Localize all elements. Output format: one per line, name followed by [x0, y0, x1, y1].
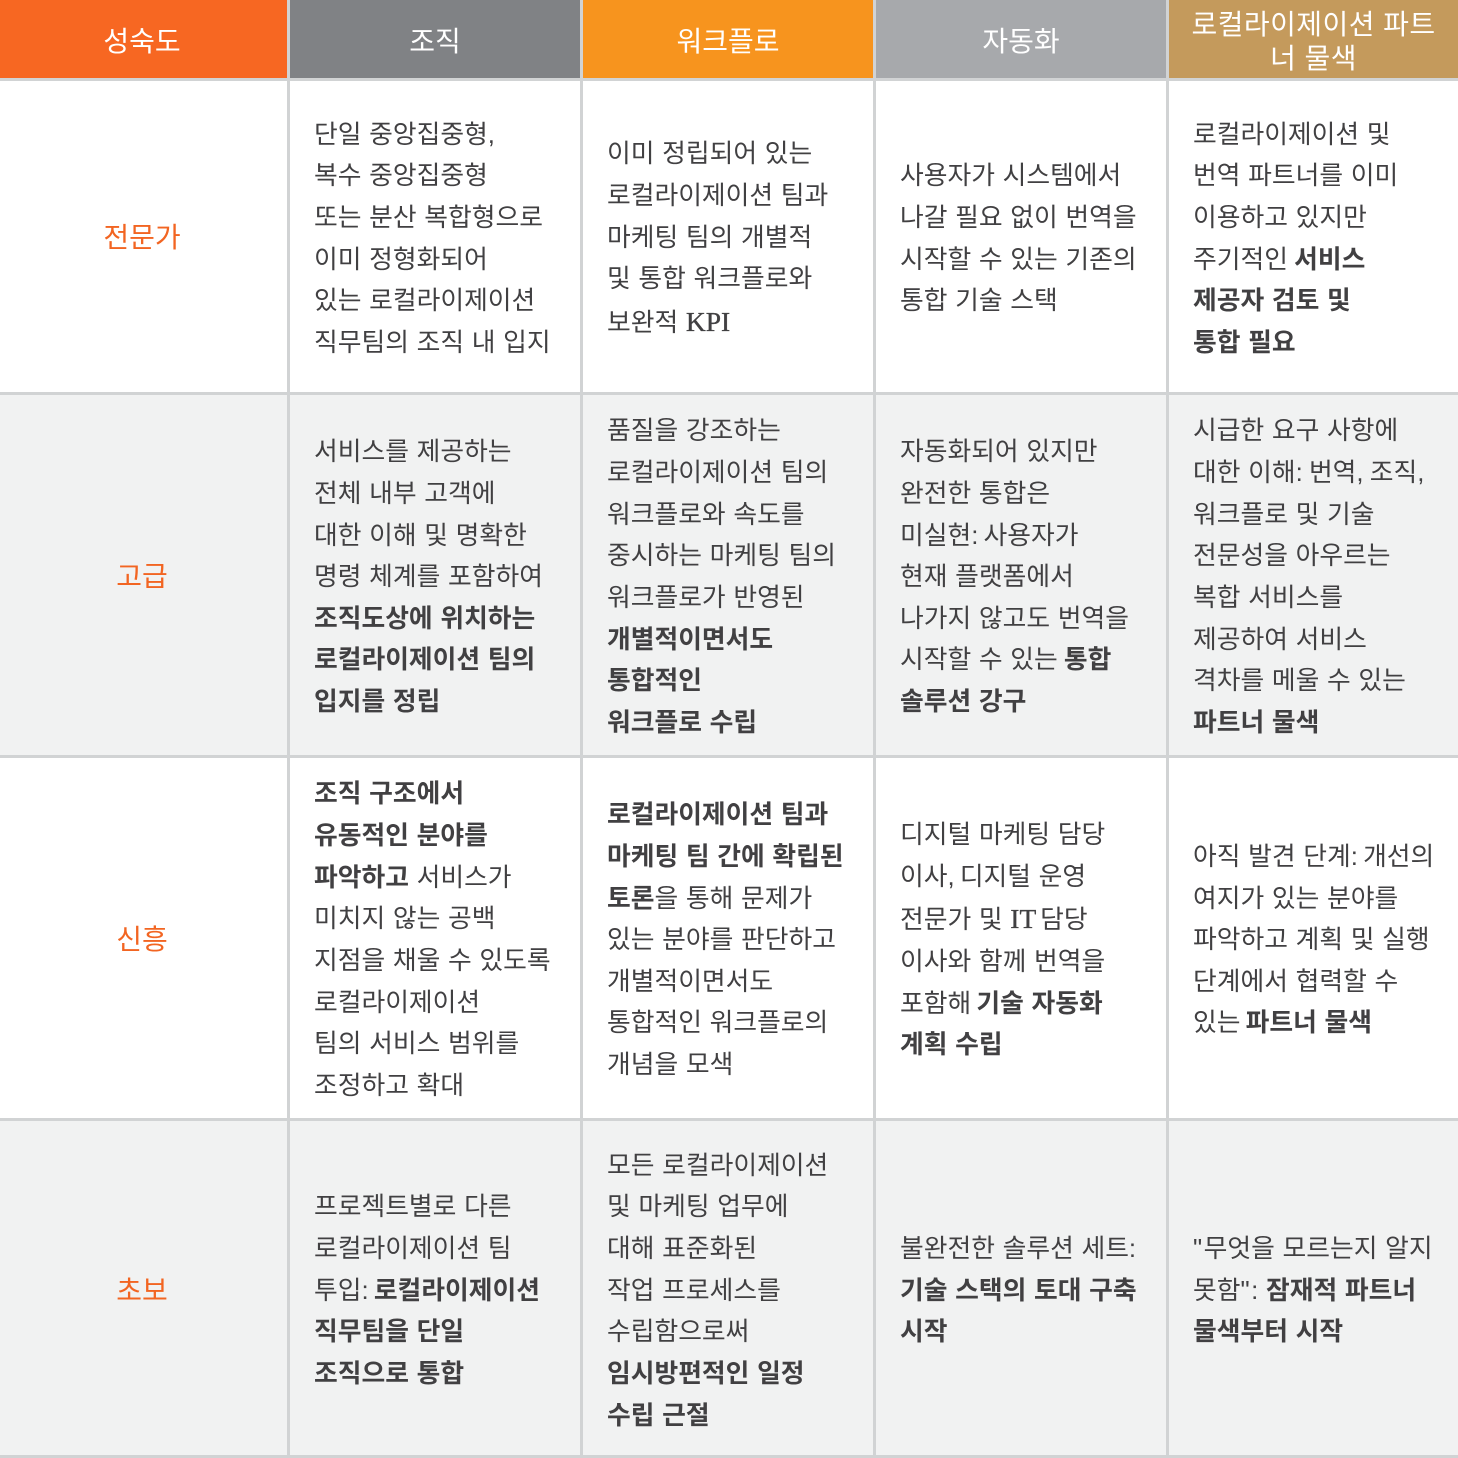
- row label: beginner: 초보: [116, 1274, 168, 1306]
- cell: advanced automation: 완전한 통합은: [900, 480, 1050, 508]
- header: localization partner sourcing: 로컬라이제이션 파트: [1191, 9, 1436, 40]
- cell: expert organization: 직무팀의 조직 내 입지: [314, 329, 551, 357]
- cell: expert partner: 주기적인 서비스: [1193, 246, 1365, 274]
- cell: advanced automation: 미실현: 사용자가: [900, 522, 1078, 550]
- cell: emerging partner: 아직 발견 단계: 개선의: [1193, 843, 1434, 871]
- cell: expert workflow: [583, 81, 873, 392]
- cell: emerging workflow: [583, 758, 873, 1118]
- cell: expert workflow: 이미 정립되어 있는: [607, 140, 812, 168]
- cell: advanced organization: 명령 체계를 포함하여: [314, 563, 543, 591]
- cell: emerging workflow: 개념을 모색: [607, 1051, 733, 1079]
- cell: emerging organization: 유동적인 분야를: [314, 822, 488, 850]
- cell: expert partner: [1169, 81, 1458, 392]
- row label: emerging: 신흥: [116, 924, 168, 954]
- cell: emerging partner: 단계에서 협력할 수: [1193, 968, 1398, 996]
- cell: beginner organization: 직무팀을 단일: [314, 1318, 464, 1346]
- header: localization partner sourcing: 너 물색: [1270, 43, 1357, 74]
- cell: expert automation: [876, 81, 1166, 392]
- cell: beginner partner: "무엇을 모르는지 알지: [1193, 1235, 1433, 1263]
- cell: advanced automation: 나가지 않고도 번역을: [900, 605, 1129, 633]
- cell: advanced automation: 시작할 수 있는 통합: [900, 646, 1111, 674]
- cell: advanced workflow: 워크플로 수립: [607, 709, 757, 737]
- cell: expert partner: 이용하고 있지만: [1193, 204, 1367, 232]
- cell: emerging organization: 지점을 채울 수 있도록: [314, 947, 551, 975]
- cell: emerging automation: 이사와 함께 번역을: [900, 948, 1105, 976]
- cell: expert partner: 로컬라이제이션 및: [1193, 121, 1391, 149]
- cell: beginner workflow: 수립함으로써: [607, 1318, 749, 1346]
- header: workflow: 워크플로: [676, 26, 780, 57]
- cell: emerging partner: 여지가 있는 분야를: [1193, 885, 1398, 913]
- cell: advanced workflow: 로컬라이제이션 팀의: [607, 459, 828, 487]
- cell: advanced partner: 제공하여 서비스: [1193, 626, 1367, 654]
- cell: beginner partner: [1169, 1121, 1458, 1455]
- cell: emerging automation: 이사, 디지털 운영: [900, 863, 1086, 891]
- cell: beginner automation: 시작: [900, 1318, 947, 1346]
- cell: advanced partner: 복합 서비스를: [1193, 584, 1343, 612]
- cell: beginner partner: 못함": 잠재적 파트너: [1193, 1277, 1416, 1305]
- cell: expert organization: 또는 분산 복합형으로: [314, 204, 543, 232]
- cell: emerging workflow: 로컬라이제이션 팀과: [607, 801, 828, 829]
- cell: advanced partner: 격차를 메울 수 있는: [1193, 667, 1406, 695]
- header: maturity: 성숙도: [103, 26, 181, 57]
- cell: beginner automation: 불완전한 솔루션 세트:: [900, 1235, 1136, 1263]
- cell: advanced workflow: 중시하는 마케팅 팀의: [607, 542, 836, 570]
- cell: expert partner: 번역 파트너를 이미: [1193, 162, 1398, 190]
- row label: expert: [0, 81, 287, 392]
- header: maturity: [0, 0, 287, 78]
- cell: expert partner: 제공자 검토 및: [1193, 287, 1351, 315]
- cell: emerging partner: 있는 파트너 물색: [1193, 1009, 1372, 1037]
- cell: expert automation: 시작할 수 있는 기존의: [900, 246, 1137, 274]
- cell: expert workflow: 로컬라이제이션 팀과: [607, 182, 828, 210]
- row: emerging: [0, 758, 1458, 1118]
- cell: advanced organization: 로컬라이제이션 팀의: [314, 646, 535, 674]
- cell: expert organization: 있는 로컬라이제이션: [314, 287, 535, 315]
- cell: emerging workflow: 통합적인 워크플로의: [607, 1009, 828, 1037]
- cell: advanced organization: 전체 내부 고객에: [314, 480, 495, 508]
- cell: advanced partner: 대한 이해: 번역, 조직,: [1193, 459, 1424, 487]
- cell: emerging workflow: 토론을 통해 문제가: [607, 885, 812, 913]
- cell: emerging organization: 조직 구조에서: [314, 780, 464, 808]
- cell: advanced automation: 현재 플랫폼에서: [900, 563, 1074, 591]
- cell: advanced partner: 전문성을 아우르는: [1193, 542, 1391, 570]
- cell: advanced partner: 워크플로 및 기술: [1193, 501, 1374, 529]
- cell: emerging workflow: 마케팅 팀 간에 확립된: [607, 843, 844, 871]
- cell: expert workflow: 및 통합 워크플로와: [607, 265, 812, 293]
- row: expert: [0, 81, 1458, 392]
- header: automation: 자동화: [982, 26, 1060, 57]
- row: advanced: [0, 395, 1458, 755]
- cell: emerging automation: 계획 수립: [900, 1031, 1003, 1059]
- cell: expert automation: 통합 기술 스택: [900, 287, 1058, 315]
- header: organization: [290, 0, 580, 78]
- cell: advanced organization: 대한 이해 및 명확한: [314, 522, 527, 550]
- cell: beginner organization: 프로젝트별로 다른: [314, 1193, 512, 1221]
- cell: beginner workflow: 수립 근절: [607, 1402, 710, 1430]
- cell: emerging organization: 팀의 서비스 범위를: [314, 1030, 519, 1058]
- cell: beginner partner: 물색부터 시작: [1193, 1318, 1343, 1346]
- cell: expert organization: [290, 81, 580, 392]
- cell: emerging partner: [1169, 758, 1458, 1118]
- cell: beginner workflow: 작업 프로세스를: [607, 1277, 781, 1305]
- cell: expert automation: 사용자가 시스템에서: [900, 162, 1121, 190]
- cell: advanced workflow: [583, 395, 873, 755]
- cell: beginner organization: [290, 1121, 580, 1455]
- cell: beginner automation: [876, 1121, 1166, 1455]
- cell: advanced organization: 입지를 정립: [314, 688, 440, 716]
- cell: expert partner: 통합 필요: [1193, 329, 1296, 357]
- cell: emerging partner: 파악하고 계획 및 실행: [1193, 926, 1430, 954]
- cell: advanced partner: 파트너 물색: [1193, 709, 1319, 737]
- cell: advanced partner: [1169, 395, 1458, 755]
- cell: expert workflow: 마케팅 팀의 개별적: [607, 224, 812, 252]
- cell: expert organization: 이미 정형화되어: [314, 246, 488, 274]
- cell: advanced organization: 조직도상에 위치하는: [314, 605, 535, 633]
- cell: expert automation: 나갈 필요 없이 번역을: [900, 204, 1137, 232]
- cell: beginner organization: 조직으로 통합: [314, 1360, 464, 1388]
- cell: emerging workflow: 개별적이면서도: [607, 968, 773, 996]
- header: organization: 조직: [409, 26, 461, 57]
- cell: expert organization: 복수 중앙집중형: [314, 162, 488, 190]
- cell: advanced workflow: 개별적이면서도: [607, 626, 773, 654]
- cell: expert workflow: 보완적 KPI: [607, 306, 730, 337]
- row label: emerging: [0, 758, 287, 1118]
- cell: beginner workflow: 및 마케팅 업무에: [607, 1193, 788, 1221]
- cell: advanced workflow: 워크플로와 속도를: [607, 501, 805, 529]
- cell: beginner automation: 기술 스택의 토대 구축: [900, 1277, 1137, 1305]
- cell: beginner organization: 투입: 로컬라이제이션: [314, 1277, 540, 1305]
- cell: advanced partner: 시급한 요구 사항에: [1193, 417, 1398, 445]
- cell: beginner workflow: 임시방편적인 일정: [607, 1360, 805, 1388]
- cell: beginner workflow: 대해 표준화된: [607, 1235, 757, 1263]
- cell: beginner workflow: 모든 로컬라이제이션: [607, 1152, 828, 1180]
- cell: expert organization: 단일 중앙집중형,: [314, 121, 495, 149]
- cell: emerging automation: [876, 758, 1166, 1118]
- cell: beginner organization: 로컬라이제이션 팀: [314, 1235, 512, 1263]
- cell: advanced workflow: 워크플로가 반영된: [607, 584, 805, 612]
- cell: beginner workflow: [583, 1121, 873, 1455]
- cell: advanced workflow: 품질을 강조하는: [607, 417, 781, 445]
- cell: emerging organization: 파악하고 서비스가: [314, 864, 512, 892]
- cell: advanced organization: 서비스를 제공하는: [314, 438, 512, 466]
- cell: emerging workflow: 있는 분야를 판단하고: [607, 926, 836, 954]
- cell: emerging organization: [290, 758, 580, 1118]
- row: beginner: [0, 1121, 1458, 1455]
- cell: advanced automation: 자동화되어 있지만: [900, 438, 1098, 466]
- header: automation: [876, 0, 1166, 78]
- row label: expert: 전문가: [103, 222, 181, 252]
- row label: advanced: 고급: [116, 560, 168, 592]
- cell: emerging automation: 디지털 마케팅 담당: [900, 821, 1105, 849]
- cell: emerging automation: 포함해 기술 자동화: [900, 990, 1103, 1018]
- header: localization partner sourcing: [1169, 0, 1458, 78]
- cell: advanced automation: [876, 395, 1166, 755]
- header: workflow: [583, 0, 873, 78]
- cell: advanced automation: 솔루션 강구: [900, 688, 1026, 716]
- row label: beginner: [0, 1121, 287, 1455]
- cell: emerging organization: 로컬라이제이션: [314, 989, 480, 1017]
- cell: emerging organization: 조정하고 확대: [314, 1072, 464, 1100]
- cell: emerging organization: 미치지 않는 공백: [314, 905, 495, 933]
- cell: advanced organization: [290, 395, 580, 755]
- row label: advanced: [0, 395, 287, 755]
- table header row: [0, 0, 1458, 78]
- cell: advanced workflow: 통합적인: [607, 667, 702, 695]
- cell: emerging automation: 전문가 및 IT 담당: [900, 903, 1088, 934]
